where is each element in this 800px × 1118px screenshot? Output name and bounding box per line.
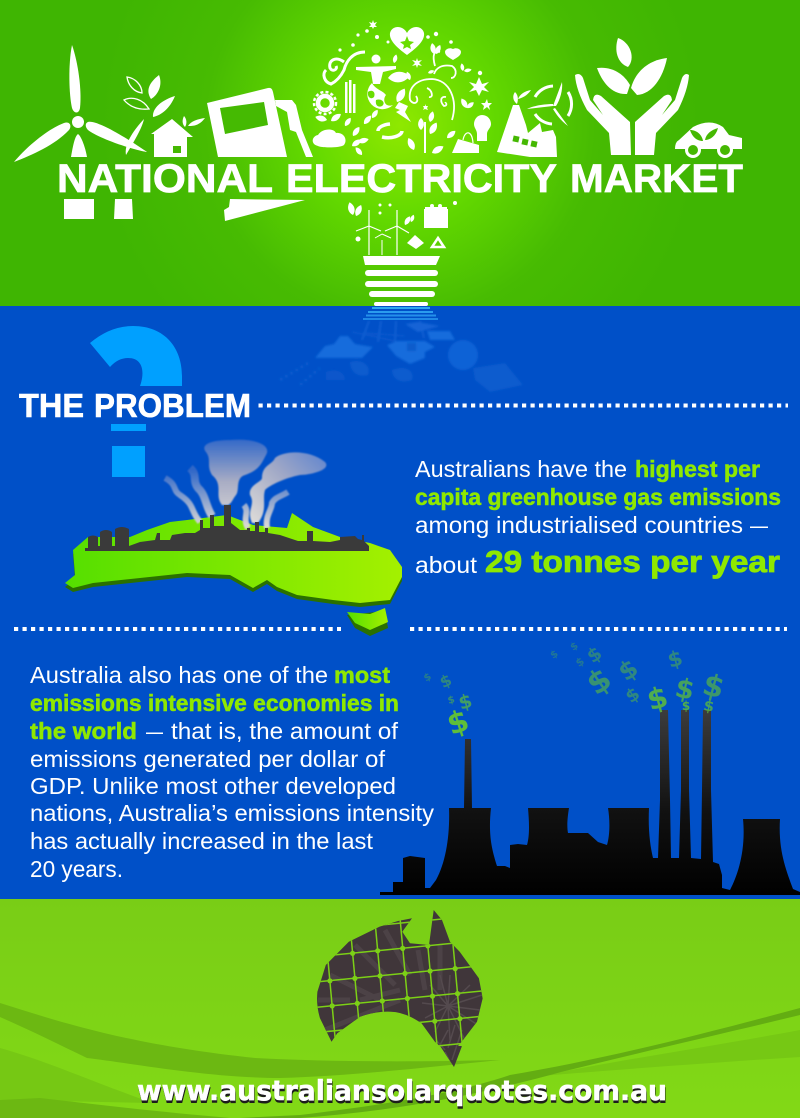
text block: highest emissions: Australians have the bbox=[415, 456, 627, 482]
title: MARKET bbox=[570, 157, 743, 201]
bulb icon: cloud bbox=[313, 129, 346, 147]
smoke plumes bbox=[165, 440, 326, 528]
text block: emissions intensive economy: GDP. Unlike most other developed bbox=[30, 773, 396, 799]
dollar signs: $ bbox=[682, 699, 690, 713]
dollar signs: $ bbox=[443, 703, 473, 743]
bulb icon: bars bbox=[345, 80, 356, 113]
bulb base stripes bbox=[363, 256, 440, 306]
footer url: www.australiansolarquotes.com.au bbox=[138, 1076, 668, 1110]
dollar signs: $ bbox=[422, 671, 434, 684]
text block: highest emissions: among industrialised countries bbox=[415, 512, 743, 538]
text block: emissions intensive economy: that is, the amount of bbox=[171, 718, 399, 744]
text block: emissions intensive economy: nations, Australia’s emissions intensity bbox=[30, 800, 435, 826]
bulb icon: leaf cluster left bbox=[343, 54, 412, 157]
bulb icon: heart with star bbox=[390, 27, 424, 55]
panel: green footer bbox=[0, 899, 800, 1118]
dollar signs: $ bbox=[573, 655, 587, 670]
text block: emissions intensive economy: most bbox=[334, 662, 390, 688]
heading: the problem: THE bbox=[19, 387, 84, 424]
bulb icon: gear flower bbox=[314, 92, 343, 123]
icon: small turbine and leaves bbox=[124, 75, 175, 155]
dollar signs: $ bbox=[699, 667, 728, 706]
icon: eco car bbox=[675, 122, 742, 156]
map: mainland bbox=[65, 513, 402, 603]
bulb icon: shopping bag bbox=[452, 133, 479, 153]
bulb icon: swirl bbox=[324, 52, 365, 84]
bulb icon: small turbines bbox=[347, 201, 409, 255]
map: tasmania bbox=[347, 608, 388, 636]
bulb icon: globe bbox=[367, 83, 393, 109]
text block: emissions intensive economy: — bbox=[146, 718, 163, 744]
dollar signs: $ bbox=[643, 679, 672, 717]
dollar signs bbox=[422, 640, 728, 743]
bulb icons: flowers bbox=[369, 20, 492, 110]
icon: light bulb of eco symbols bbox=[313, 20, 492, 306]
logo: solar panel australia bbox=[317, 910, 483, 1067]
bulb icon: small lightbulb bbox=[474, 115, 491, 141]
icon: house bbox=[151, 116, 205, 157]
dollar signs: $ bbox=[622, 683, 644, 708]
text block: emissions intensive economy: 20 years. bbox=[30, 856, 123, 882]
text block: highest emissions: 29 tonnes per year bbox=[485, 544, 780, 579]
dollar signs: $ bbox=[456, 690, 475, 715]
bulb icons: scattered dots bbox=[338, 29, 482, 242]
heading: the problem: PROBLEM bbox=[94, 387, 251, 424]
dollar signs: $ bbox=[437, 670, 455, 692]
title bbox=[57, 157, 743, 201]
icon: bulb reflection bbox=[280, 307, 523, 392]
footer url: www.australiansolarquotes.com.au bbox=[137, 1074, 667, 1107]
illustration: power station with dollar smoke bbox=[380, 640, 800, 895]
industrial skyline bbox=[85, 505, 369, 551]
icon: hands holding plant bbox=[575, 38, 689, 155]
panel: blue problem section bbox=[0, 306, 800, 899]
text block: highest emissions: — bbox=[750, 512, 768, 538]
text block: emissions intensive economy: the world bbox=[30, 718, 137, 744]
text block: emissions intensive economy bbox=[30, 662, 435, 882]
dollar signs: $ bbox=[447, 694, 456, 707]
dollar signs: $ bbox=[702, 696, 716, 716]
icon: fuel pump bbox=[207, 88, 313, 221]
text block: emissions intensive economy: Australia also has one of the bbox=[30, 662, 328, 688]
bulb icon: gift box bbox=[424, 204, 448, 228]
dollar signs: $ bbox=[569, 640, 581, 653]
bulb icon: recycle arrows bbox=[378, 124, 402, 138]
bulb icon: swirl tree bbox=[410, 52, 456, 120]
bulb icon: person bbox=[356, 54, 396, 84]
text block: highest emissions: about bbox=[415, 552, 478, 578]
text block: highest emissions bbox=[415, 456, 781, 579]
heading: the problem bbox=[19, 387, 251, 424]
dollar signs: $ bbox=[549, 648, 561, 661]
title: ELECTRICITY bbox=[286, 157, 557, 201]
dollar signs: $ bbox=[583, 642, 606, 668]
dollar signs: $ bbox=[613, 653, 644, 687]
illustration: australia with industrial skyline bbox=[65, 440, 402, 636]
map: mainland shadow bbox=[65, 517, 402, 607]
bulb icon: leaves right bbox=[427, 43, 475, 110]
title: NATIONAL bbox=[57, 157, 273, 201]
icon: wind turbine bbox=[14, 45, 147, 219]
icon: question mark bbox=[90, 326, 182, 477]
bulb icon: bottom tree leaves bbox=[406, 111, 457, 156]
text block: highest emissions: highest per bbox=[635, 456, 760, 482]
dollar signs: $ bbox=[672, 673, 697, 707]
bulb icon: recycle and heart tag bbox=[403, 214, 444, 249]
text block: emissions intensive economy: emissions intensive economies in bbox=[30, 690, 399, 716]
text block: highest emissions: capita greenhouse gas emissions bbox=[415, 484, 781, 510]
text block: emissions intensive economy: has actually increased in the last bbox=[30, 828, 374, 854]
power station silhouette bbox=[380, 710, 800, 895]
text block: emissions intensive economy: emissions generated per dollar of bbox=[30, 746, 386, 772]
dollar signs: $ bbox=[665, 646, 685, 673]
icon: factory with turbine bbox=[497, 82, 572, 157]
bulb icon: lightning bolt bbox=[395, 102, 411, 122]
panel: green header bbox=[0, 0, 800, 306]
dollar signs: $ bbox=[580, 661, 618, 703]
